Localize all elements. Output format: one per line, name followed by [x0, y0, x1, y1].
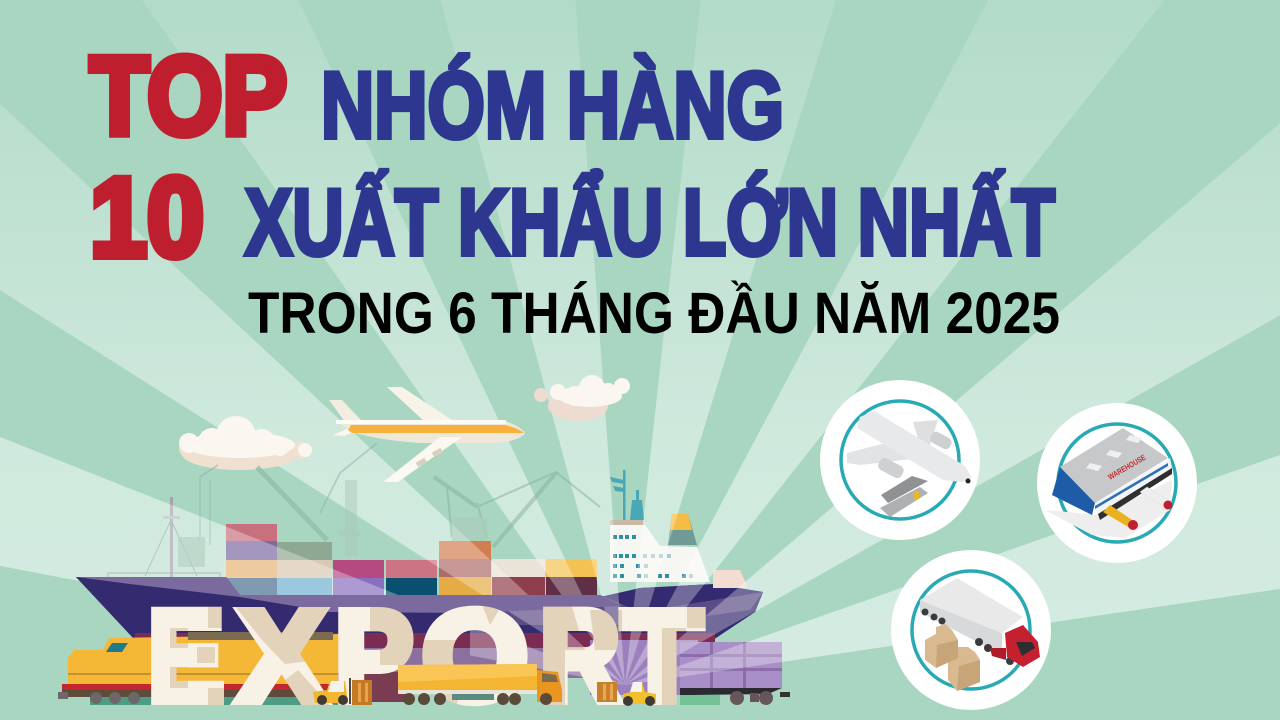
icon: warehouse in circle: WAREHOUSE: [1106, 453, 1148, 482]
cloud right: [534, 375, 630, 421]
yellow locomotive and train: [58, 632, 408, 705]
forklift with crate right: [597, 682, 656, 706]
EXPORT lettering: [148, 585, 702, 720]
forklift with crate left: [313, 678, 372, 705]
cargo ship and containers: [76, 443, 790, 705]
title: [90, 35, 1060, 346]
cloud left: [179, 416, 312, 470]
yellow truck: [398, 664, 562, 705]
icon: truck and boxes in circle: [891, 550, 1051, 710]
subtitle: TRONG 6 THÁNG ĐẦU NĂM 2025: [248, 281, 1060, 346]
airplane: [329, 387, 525, 482]
icon: warehouse in circle: [1037, 403, 1197, 563]
title line: NHÓM HÀNG: NHÓM HÀNG: [321, 52, 784, 158]
title number: 10: 10: [90, 155, 204, 280]
icon: airplane in circle: [820, 380, 980, 540]
title word: TOP: TOP: [90, 35, 287, 158]
